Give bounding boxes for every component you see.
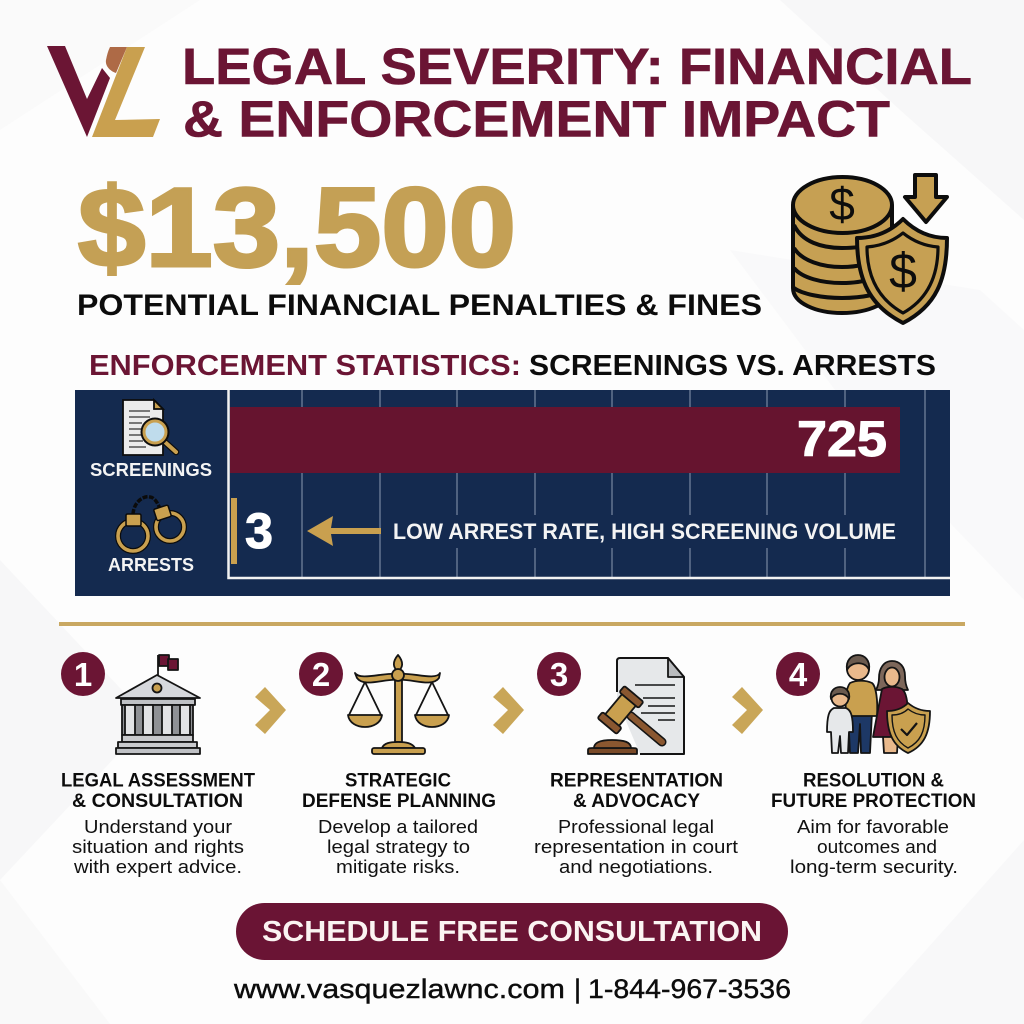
step 2 description <box>318 816 478 877</box>
label: screenings: SCREENINGS <box>90 459 212 480</box>
arrow: pointing at arrests bar <box>307 516 381 546</box>
icon: document with magnifier <box>123 400 176 455</box>
bar: screenings 725: 725 <box>797 411 887 467</box>
step 4 description: Aim for favorable <box>797 816 949 837</box>
badge 1: 1 <box>74 656 92 693</box>
step 3 heading <box>550 770 723 812</box>
badge 3: 3 <box>550 656 568 693</box>
step 1 description: with expert advice. <box>73 856 242 877</box>
step 2 heading <box>302 770 496 812</box>
step 2 description: legal strategy to <box>327 836 470 857</box>
bar chart: screenings vs arrests <box>75 390 950 596</box>
step 1 heading: LEGAL ASSESSMENT <box>61 770 255 792</box>
step 1: legal assessment <box>61 652 255 877</box>
button: schedule free consultation: SCHEDULE FREE CONSULTATION <box>262 916 762 948</box>
annotation: low arrest rate: LOW ARREST RATE, HIGH SCREENING VOLUME <box>393 519 896 544</box>
button: schedule free consultation <box>236 903 788 960</box>
bar: screenings 725 <box>230 407 900 473</box>
step 2 heading: STRATEGIC <box>345 770 451 792</box>
step 1 description <box>72 816 244 877</box>
step 2 description: Develop a tailored <box>318 816 478 837</box>
footer: website and phone: www.vasquezlawnc.com <box>233 974 565 1004</box>
bar: arrests 3 <box>231 498 273 564</box>
step 4 description <box>790 816 958 877</box>
step 3 description <box>534 816 738 877</box>
bar: arrests 3: 3 <box>245 503 273 559</box>
step 1 description: Understand your <box>84 816 232 837</box>
step 4 description: long-term security. <box>790 856 958 877</box>
title: & ENFORCEMENT IMPACT <box>183 90 890 148</box>
title: LEGAL SEVERITY: FINANCIAL <box>182 38 972 95</box>
step 1 heading <box>61 770 255 812</box>
section heading: enforcement statistics <box>89 350 936 382</box>
title <box>182 38 972 148</box>
badge 2 <box>299 652 343 696</box>
icon: gavel and document <box>588 658 684 754</box>
section heading: enforcement statistics: SCREENINGS VS. ARRESTS <box>529 350 936 382</box>
step 3 heading: & ADVOCACY <box>573 791 700 812</box>
step 2: strategic defense <box>299 652 496 877</box>
label: arrests: ARRESTS <box>108 554 194 575</box>
step 3 heading: REPRESENTATION <box>550 770 723 792</box>
step 4 heading <box>771 770 976 812</box>
divider <box>59 622 965 626</box>
badge 4: 4 <box>789 656 808 693</box>
logo: VL monogram <box>47 46 160 137</box>
badge 3 <box>537 652 581 696</box>
footer: website and phone: 1-844-967-3536 <box>588 974 791 1004</box>
badge 1 <box>61 652 105 696</box>
footer: website and phone: | <box>574 974 581 1004</box>
step 1 description: situation and rights <box>72 836 244 857</box>
arrow: chevron 1 <box>255 687 286 734</box>
footer: website and phone <box>233 974 791 1004</box>
step 4 description: outcomes and <box>817 836 937 857</box>
step 3 description: Professional legal <box>558 816 714 837</box>
step 1 heading: & CONSULTATION <box>72 791 243 812</box>
icon: coins, shield and down arrow: $ <box>889 243 917 299</box>
badge 4 <box>776 652 820 696</box>
icon: family with shield <box>827 655 930 753</box>
icon: courthouse <box>116 655 200 754</box>
big number: $13,500: $13,500 <box>78 165 516 290</box>
step 4 heading: RESOLUTION & <box>803 770 944 792</box>
icon: scales of justice <box>348 655 449 754</box>
icon: coins, shield and down arrow <box>793 175 947 323</box>
badge 2: 2 <box>312 656 330 693</box>
subheading: potential penalties: POTENTIAL FINANCIAL PENALTIES & FINES <box>77 289 762 322</box>
step 4: resolution <box>771 652 976 877</box>
section heading: enforcement statistics: ENFORCEMENT STATISTICS: <box>89 350 521 382</box>
arrow: chevron 3 <box>732 687 763 734</box>
step 3 description: representation in court <box>534 836 738 857</box>
step 3 description: and negotiations. <box>559 856 713 877</box>
arrow: chevron 2 <box>493 687 524 734</box>
step 2 heading: DEFENSE PLANNING <box>302 791 496 812</box>
icon: coins, shield and down arrow: $ <box>829 178 855 230</box>
icon: handcuffs <box>118 497 184 551</box>
step 2 description: mitigate risks. <box>336 856 460 877</box>
step 4 heading: FUTURE PROTECTION <box>771 791 976 812</box>
step 3: representation <box>534 652 738 877</box>
